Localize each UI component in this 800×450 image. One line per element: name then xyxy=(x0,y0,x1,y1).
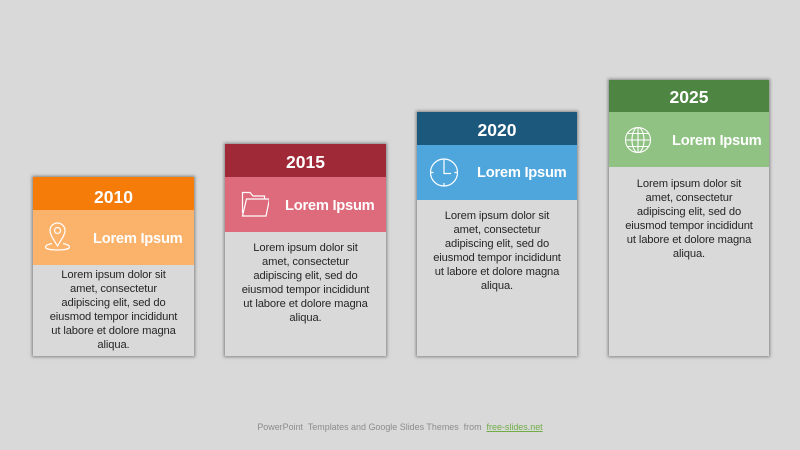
text block: aliqua. xyxy=(97,339,130,351)
band: red label xyxy=(225,177,386,232)
text block: Lorem ipsum dolor sit xyxy=(253,242,358,254)
text block xyxy=(242,242,370,324)
text block: ut labore et dolore magna xyxy=(51,325,176,337)
text block: adipiscing elit, sed do xyxy=(637,206,741,218)
label: Lorem Ipsum: Lorem Ipsum xyxy=(477,165,566,181)
year heading: 2020: 2020 xyxy=(478,120,516,140)
icon: folder xyxy=(242,192,269,217)
text block: adipiscing elit, sed do xyxy=(61,297,166,309)
text block: ut labore et dolore magna xyxy=(243,298,368,310)
text block: Lorem ipsum dolor sit xyxy=(637,178,741,190)
text block: aliqua. xyxy=(481,280,513,292)
label: Lorem Ipsum: Lorem Ipsum xyxy=(285,198,374,214)
label: Lorem Ipsum: Lorem Ipsum xyxy=(93,231,182,247)
text block: aliqua. xyxy=(673,248,705,260)
text block: Lorem ipsum dolor sit xyxy=(445,210,549,222)
text block: ut labore et dolore magna xyxy=(627,234,751,246)
text block: amet, consectetur xyxy=(454,224,540,236)
icon: globe xyxy=(625,127,651,153)
text block: adipiscing elit, sed do xyxy=(253,270,358,282)
text block: eiusmod tempor incididunt xyxy=(242,284,369,296)
text block xyxy=(433,210,561,292)
text block: eiusmod tempor incididunt xyxy=(625,220,753,232)
text block: eiusmod tempor incididunt xyxy=(433,252,561,264)
text block xyxy=(50,269,178,351)
band: green label xyxy=(609,112,769,167)
panel: 2025 milestone xyxy=(609,80,769,356)
panel: 2015 milestone xyxy=(225,144,386,356)
year heading: 2015 xyxy=(225,144,386,177)
text block: Lorem ipsum dolor sit xyxy=(61,269,166,281)
icon: map pin xyxy=(44,222,70,251)
panel: 2010 milestone xyxy=(33,177,194,356)
text block xyxy=(625,178,753,260)
text block: amet, consectetur xyxy=(70,283,157,295)
footer credit: PowerPoint Templates and Google Slides Themes from free-slides.net xyxy=(257,422,543,432)
text block: amet, consectetur xyxy=(262,256,349,268)
icon: clock xyxy=(430,158,458,187)
text block: aliqua. xyxy=(289,312,322,324)
panel: 2020 milestone xyxy=(417,112,577,356)
year heading: 2010: 2010 xyxy=(94,187,133,207)
year heading: 2020 xyxy=(417,112,577,145)
label: Lorem Ipsum: Lorem Ipsum xyxy=(672,133,761,149)
text block: eiusmod tempor incididunt xyxy=(50,311,177,323)
band: orange label xyxy=(33,210,194,265)
text block: amet, consectetur xyxy=(646,192,732,204)
year heading: 2025: 2025 xyxy=(670,87,708,107)
year heading: 2025 xyxy=(609,80,769,112)
year heading: 2015: 2015 xyxy=(286,152,325,172)
text block: ut labore et dolore magna xyxy=(435,266,559,278)
band: blue label xyxy=(417,145,577,200)
text block: adipiscing elit, sed do xyxy=(445,238,549,250)
year heading: 2010 xyxy=(33,177,194,210)
